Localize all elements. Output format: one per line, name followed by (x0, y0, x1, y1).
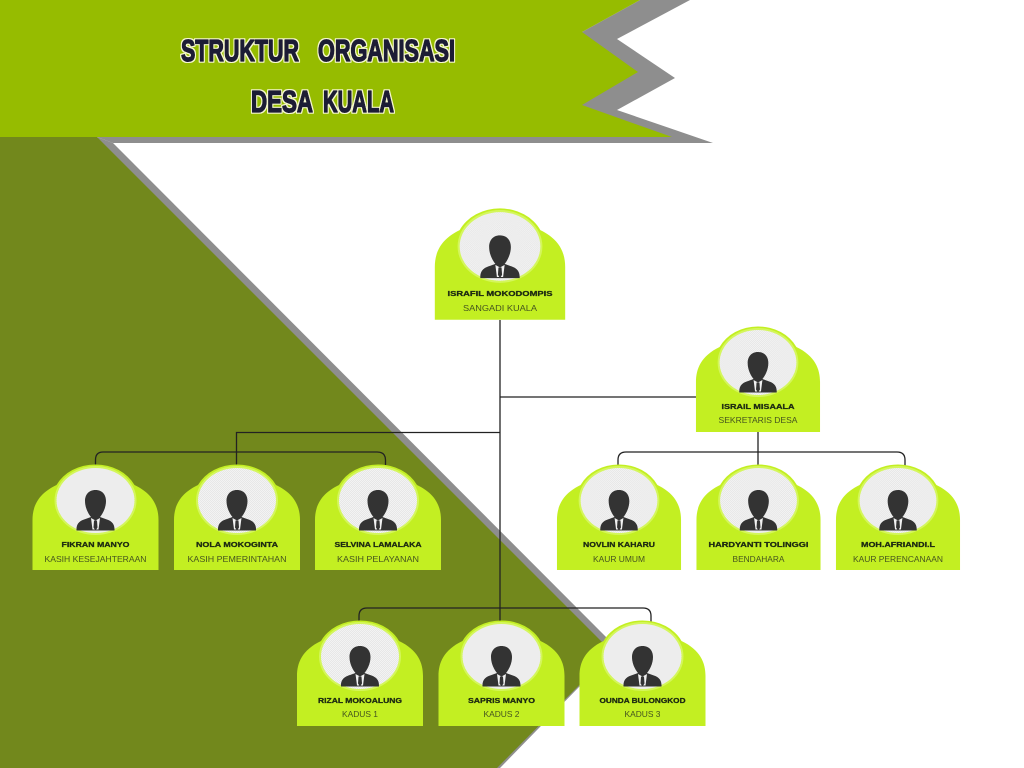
card: Nola Mokoginta (174, 464, 300, 570)
banner: green ribbon (0, 0, 672, 137)
card: Ounda Bulongkod: KADUS 3 (624, 710, 661, 719)
card: Novlin Kaharu: NOVLIN KAHARU (583, 540, 655, 549)
card: Ounda Bulongkod (580, 620, 706, 726)
connector lines (96, 320, 905, 622)
card: Hardyanti Tolinggi: BENDAHARA (732, 555, 785, 564)
card: Selvina Lamalaka (315, 464, 441, 570)
card: Selvina Lamalaka: SELVINA LAMALAKA (334, 540, 422, 549)
card: Rizal Mokoalung: RIZAL MOKOALUNG (318, 696, 402, 705)
card: Fikran Manyo: KASIH KESEJAHTERAAN (44, 555, 147, 564)
card: Novlin Kaharu: KAUR UMUM (593, 555, 645, 564)
card: Israil Misaala (696, 326, 820, 432)
card: Sapris Manyo (438, 620, 564, 726)
card: Hardyanti Tolinggi: HARDYANTI TOLINGGI (708, 540, 808, 549)
card: Israil Misaala: SEKRETARIS DESA (718, 416, 798, 425)
title: STRUKTUR (181, 33, 299, 68)
title: ORGANISASI (318, 33, 455, 68)
card: Fikran Manyo: FIKRAN MANYO (62, 540, 130, 549)
card: Moh. Afriandi L: MOH.AFRIANDI.L (861, 540, 935, 549)
card: Rizal Mokoalung (297, 620, 423, 726)
card: Hardyanti Tolinggi (696, 464, 821, 570)
card: Rizal Mokoalung: KADUS 1 (342, 710, 378, 719)
background: dark green triangle (0, 137, 612, 768)
card: Israfil Mokodompis: SANGADI KUALA (463, 304, 538, 313)
card: Novlin Kaharu (557, 464, 681, 570)
title (181, 33, 455, 119)
background: grey diagonal edge (97, 137, 617, 768)
card: Sapris Manyo: KADUS 2 (484, 710, 520, 719)
card: Israfil Mokodompis (435, 208, 565, 320)
banner shadow: grey ribbon (97, 0, 713, 143)
card: Ounda Bulongkod: OUNDA BULONGKOD (600, 696, 686, 705)
title: DESA (251, 84, 313, 119)
card: Israfil Mokodompis: ISRAFIL MOKODOMPIS (448, 289, 552, 298)
card: Moh. Afriandi L (836, 464, 960, 570)
card: Fikran Manyo (32, 464, 158, 570)
card: Selvina Lamalaka: KASIH PELAYANAN (337, 555, 419, 564)
card: Moh. Afriandi L: KAUR PERENCANAAN (853, 555, 943, 564)
card: Nola Mokoginta: KASIH PEMERINTAHAN (188, 555, 287, 564)
title: KUALA (323, 84, 394, 119)
card: Israil Misaala: ISRAIL MISAALA (722, 402, 795, 411)
card: Sapris Manyo: SAPRIS MANYO (468, 696, 535, 705)
card: Nola Mokoginta: NOLA MOKOGINTA (196, 540, 279, 549)
